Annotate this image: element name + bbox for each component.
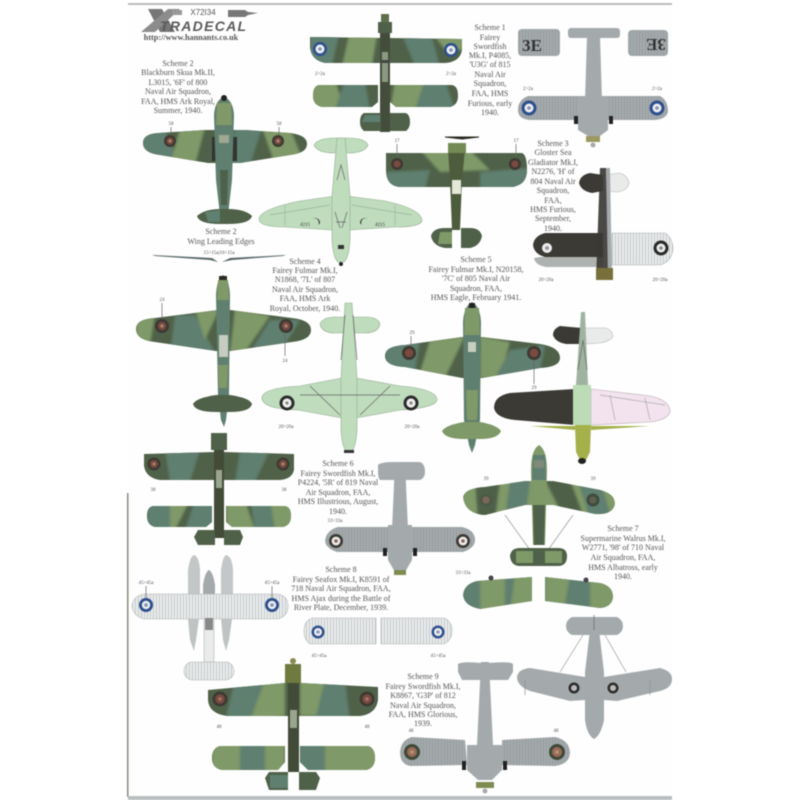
text: scheme 6: Scheme 6	[322, 459, 354, 468]
plane: Swordfish underside, scheme 1	[518, 28, 668, 148]
text: scheme 2: Blackburn Skua Mk.II,	[141, 68, 215, 77]
plane: Swordfish underside, scheme 1: 3E	[522, 36, 542, 55]
text: scheme 7: Supermarine Walrus Mk.I,	[581, 534, 665, 543]
logo: Xtradecal	[141, 8, 258, 42]
plane: Swordfish underside, scheme 9: 48	[408, 729, 414, 734]
text: scheme 4	[270, 257, 340, 313]
plane: Fulmar underside, scheme 4: 20>20a	[278, 425, 294, 430]
text: scheme 1: Mk.I, P4085,	[469, 51, 511, 60]
plane: Seafox lower wings, scheme 8: 45>45a	[311, 654, 327, 659]
text: scheme 6: Air Squadron, FAA,	[306, 488, 370, 497]
plane: Walrus lower wings, scheme 7	[463, 575, 615, 612]
text: scheme 3: September,	[535, 214, 571, 223]
text: scheme 3: Scheme 3	[537, 139, 569, 148]
plane: Seafox lower wings, scheme 8	[304, 618, 452, 659]
plane: Swordfish underside, scheme 9	[400, 662, 570, 794]
plane: Swordfish underside, scheme 6: 33>33a	[455, 571, 471, 576]
text: scheme 4: FAA, HMS Ark	[280, 294, 330, 303]
plane: Skua upper, scheme 2: 58	[168, 122, 174, 127]
text: scheme 2: FAA, HMS Ark Royal,	[141, 97, 215, 106]
text: scheme 3: HMS Furious,	[530, 205, 576, 214]
text: scheme 1: FAA, HMS	[472, 89, 508, 98]
text: scheme 5: HMS Eagle, February 1941.	[431, 293, 521, 302]
plane: Fulmar upper, scheme 4: 24	[282, 359, 288, 364]
plane: Swordfish underside, scheme 1: 2>2a	[652, 87, 663, 92]
text: scheme 2	[141, 59, 215, 115]
plane: Swordfish upper, scheme 9: 48	[364, 725, 370, 730]
plane: Swordfish underside, scheme 1: 3E	[646, 35, 666, 54]
plane: Gladiator upper, scheme 5	[386, 137, 530, 248]
plane: Fulmar upper, scheme 5: 29	[532, 386, 537, 391]
plane: Swordfish upper, scheme 6: 38	[150, 488, 156, 493]
plane: Gladiator underside, scheme 3: 20>20a	[652, 278, 668, 283]
text: scheme 8: Fairey Seafox Mk.I, K8591 of	[293, 575, 390, 584]
plane: Swordfish underside, scheme 1: 2>2a	[523, 87, 534, 92]
plane: Seafox lower wings, scheme 8: 45>45a	[430, 654, 446, 659]
text: scheme 5: Scheme 5	[460, 255, 492, 264]
plane: Swordfish upper, scheme 1: 2>2a	[446, 72, 457, 77]
text: scheme 8: 718 Naval Air Squadron, FAA,	[291, 584, 391, 593]
text: scheme 8: River Plate, December, 1939.	[294, 603, 388, 612]
text: scheme 7: Scheme 7	[607, 524, 639, 533]
text: scheme 1: Furious, early	[468, 99, 512, 108]
plane: Skua upper, scheme 2	[140, 95, 307, 224]
text: scheme 9: Fairey Swordfish Mk.I,	[385, 682, 461, 691]
text: scheme 5: Squadron, FAA,	[450, 284, 502, 293]
text: scheme 1: Swordfish	[474, 42, 506, 51]
plane: Skua underside, scheme 2	[259, 138, 422, 266]
plane: Skua underside, scheme 2: 4215	[375, 223, 386, 228]
text: scheme 3: 1940.	[544, 224, 562, 233]
logo: Xtradecal: X72I34	[190, 8, 216, 17]
text: scheme 2: Summer, 1940.	[154, 106, 202, 115]
plane: Swordfish underside, scheme 6: 33>33a	[327, 519, 343, 524]
plane: Swordfish upper, scheme 6	[144, 433, 295, 545]
plane: Swordfish underside, scheme 9: 48	[554, 729, 559, 734]
plane: Gladiator upper, scheme 5: 17	[394, 139, 400, 144]
text: scheme 4: Royal, October, 1940.	[270, 304, 340, 313]
text: scheme 7: Air Squadron, FAA,	[591, 553, 655, 562]
text: scheme 9: 1939.	[414, 719, 432, 728]
wing leading edge strip	[152, 255, 286, 262]
text: scheme 4: Naval Air Squadron,	[272, 285, 338, 294]
plane: Swordfish upper, scheme 1	[310, 14, 470, 132]
logo: Xtradecal: TRADECAL	[160, 18, 247, 34]
text: scheme 1	[468, 23, 512, 117]
plane: Swordfish underside, scheme 6	[325, 462, 475, 576]
text: scheme 8	[291, 565, 391, 612]
text: wing leading edges: Wing Leading Edges	[187, 237, 255, 246]
text: scheme 7	[581, 524, 665, 581]
text: scheme 1: Fairey	[480, 33, 500, 42]
text: wing leading edges	[187, 227, 255, 256]
text: scheme 8: HMS Ajax during the Battle of	[292, 594, 391, 603]
plane: Walrus upper, scheme 7	[463, 445, 615, 566]
text: scheme 3: FAA,	[544, 196, 562, 205]
plane: Swordfish upper, scheme 9: 48	[216, 725, 222, 730]
text: scheme 3: N2276, 'H' of	[531, 167, 575, 176]
logo: Xtradecal: http://www.hannants.co.uk	[144, 33, 239, 42]
plane: Swordfish upper, scheme 9	[208, 658, 378, 790]
text: wing leading edges: 15>15a|16>15a	[203, 251, 235, 256]
text: scheme 3: 804 Naval Air	[530, 177, 576, 186]
plane: Seafox underside, scheme 8: 45>45a	[138, 581, 154, 586]
text: scheme 9: FAA, HMS Glorious,	[389, 710, 457, 719]
text: scheme 2: Naval Air Squadron,	[145, 87, 211, 96]
text: scheme 5: Fairey Fulmar Mk.I, N20158,	[428, 265, 524, 274]
text: scheme 6: P4224, '5R' of 819 Naval	[298, 478, 379, 487]
text: scheme 6: Fairey Swordfish Mk.I,	[300, 469, 376, 478]
text: scheme 8: Scheme 8	[325, 565, 357, 574]
text: scheme 7: HMS Albatross, early	[588, 563, 658, 572]
text: scheme 6: 1940.	[329, 507, 347, 516]
plane: Fulmar upper, scheme 5	[385, 302, 560, 453]
plane: Swordfish upper, scheme 6: 38	[282, 488, 287, 493]
plane: Fulmar upper, scheme 4	[136, 275, 311, 427]
text: scheme 9: K8867, 'G3P' of 812	[390, 691, 456, 700]
plane: Walrus underside, scheme 7	[517, 615, 672, 739]
plane: Fulmar underside, scheme 4: 20>20a	[404, 425, 420, 430]
plane: Gladiator underside, scheme 3	[533, 168, 673, 283]
text: scheme 1: 'U3G' of 815	[469, 60, 511, 69]
plane: Skua underside, scheme 2: 4215	[300, 223, 310, 228]
text: scheme 2: L3015, '6F' of 800	[149, 78, 207, 87]
text: scheme 3	[528, 139, 578, 233]
text: scheme 3: Gloster Sea	[534, 148, 572, 157]
plane: Skua upper, scheme 2: 58	[276, 122, 282, 127]
plane: Fulmar upper, scheme 4: 24	[160, 298, 165, 303]
text: scheme 1: Naval Air	[474, 70, 506, 79]
text: scheme 9: Naval Air Squadron,	[390, 701, 456, 710]
text: scheme 1: 1940.	[481, 108, 499, 117]
text: scheme 4: Scheme 4	[289, 257, 321, 266]
plane: Walrus upper, scheme 7: 39	[590, 477, 596, 482]
text: scheme 7: W2771, '98' of 710 Naval	[582, 543, 665, 552]
text: wing leading edges: Scheme 2	[205, 227, 237, 236]
plane: Seafox underside, scheme 8	[132, 555, 288, 680]
plane: Gladiator upper, scheme 5: 17	[514, 139, 519, 144]
text: scheme 6	[298, 459, 379, 516]
text: scheme 9	[385, 672, 461, 728]
text: scheme 1: Scheme 1	[474, 23, 506, 32]
text: scheme 5	[428, 255, 524, 302]
text: scheme 5: '7C' of 805 Naval Air	[442, 274, 510, 283]
text: scheme 1: Squadron,	[474, 79, 506, 88]
plane: Swordfish upper, scheme 1: 2>2a	[315, 72, 326, 77]
plane: Gladiator underside, scheme 3: 20>20a	[538, 278, 554, 283]
sheet background	[127, 3, 672, 800]
plane: Fulmar upper, scheme 5: 29	[410, 331, 415, 336]
text: scheme 7: 1940.	[614, 572, 632, 581]
text: scheme 3: Squadron,	[537, 186, 569, 195]
text: scheme 4: Fairey Fulmar Mk.I,	[272, 266, 338, 275]
plane: Seafox underside, scheme 8: 45>45a	[264, 581, 280, 586]
text: scheme 2: Scheme 2	[162, 59, 194, 68]
text: scheme 6: HMS Illustrious, August,	[298, 497, 378, 506]
plane: Fulmar underside black, scheme 5	[494, 312, 670, 464]
text: scheme 9: Scheme 9	[407, 672, 439, 681]
text: scheme 4: N1868, '7L' of 807	[275, 275, 335, 284]
plane: Walrus upper, scheme 7: 39	[484, 477, 489, 482]
plane: Fulmar underside, scheme 4	[262, 303, 437, 453]
text: scheme 3: Gladiator Mk.I,	[528, 158, 578, 167]
